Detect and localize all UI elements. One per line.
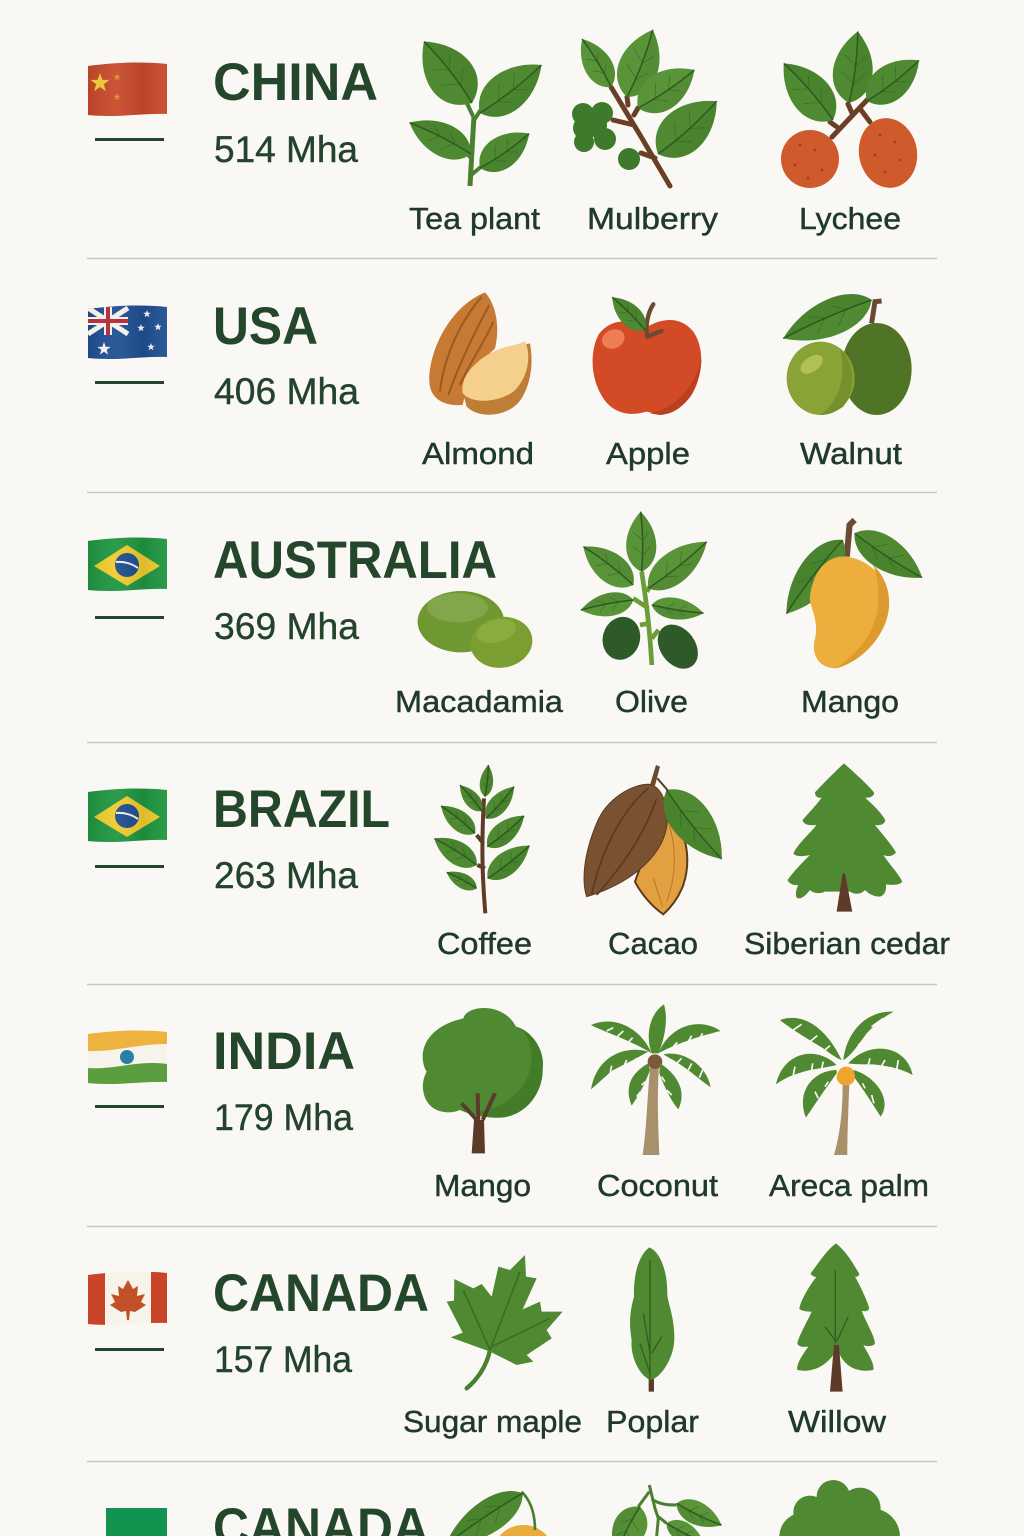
plant: walnut: Walnut — [800, 436, 902, 471]
rule — [95, 138, 164, 141]
plant: mango, cropped — [436, 1480, 553, 1536]
plant: tea plant: Tea plant — [409, 201, 540, 236]
area value: 406 Mha — [214, 371, 359, 412]
plant: apple: Apple — [606, 436, 690, 471]
plant: poplar — [606, 1247, 699, 1439]
plant: tree, cropped — [779, 1480, 900, 1536]
country name: USA — [213, 297, 318, 356]
row: second Canada (cut off) — [106, 1480, 900, 1536]
plant: willow: Willow — [788, 1404, 887, 1439]
plant: coffee — [428, 764, 537, 961]
area value: 514 Mha — [214, 129, 358, 170]
plant: tea plant — [402, 27, 554, 236]
flag: Brazil design — [88, 537, 167, 594]
plant: coconut — [591, 1004, 721, 1203]
plant: macadamia — [395, 591, 564, 719]
country name: CANADA — [213, 1264, 429, 1323]
rule — [95, 616, 164, 619]
plant: mango fruit — [772, 520, 931, 719]
plant: mulberry: Mulberry — [587, 201, 719, 236]
rule — [95, 1348, 164, 1351]
area value: 179 Mha — [214, 1097, 353, 1138]
row: USA — [88, 283, 912, 471]
area value: 263 Mha — [214, 855, 358, 896]
plant: olive: Olive — [615, 684, 688, 719]
plant: sugar maple — [403, 1255, 582, 1439]
plant: cacao: Cacao — [608, 926, 698, 961]
plant: mango tree — [423, 1008, 543, 1203]
flag: green — [106, 1508, 167, 1536]
plant: mango tree: Mango — [434, 1168, 531, 1203]
plant: mulberry — [570, 23, 732, 236]
plant: lychee: Lychee — [799, 201, 901, 236]
plant: apple — [593, 290, 702, 471]
plant: olive — [574, 511, 717, 719]
flag: Australia design — [88, 305, 167, 362]
plant: mango fruit: Mango — [801, 684, 899, 719]
country name: AUSTRALIA — [213, 531, 497, 590]
rule — [95, 381, 164, 384]
area value: 369 Mha — [214, 606, 359, 647]
row: China — [88, 23, 930, 236]
area value: 157 Mha — [214, 1339, 352, 1380]
row: Australia — [88, 511, 931, 719]
plant: areca palm — [769, 1012, 929, 1203]
plant: areca palm: Areca palm — [769, 1168, 929, 1203]
plant: coconut: Coconut — [597, 1168, 718, 1203]
flag: Canada — [88, 1271, 167, 1328]
plant: walnut — [776, 283, 912, 471]
plant: coffee: Coffee — [437, 926, 532, 961]
plant: almond: Almond — [422, 436, 534, 471]
row: Brazil — [88, 763, 950, 961]
plant: sugar maple: Sugar maple — [403, 1404, 582, 1439]
rule — [95, 865, 164, 868]
plant: branch, cropped — [602, 1485, 727, 1536]
flag: India — [88, 1030, 167, 1087]
plant: almond — [422, 292, 534, 471]
row: Canada — [88, 1243, 887, 1439]
plant: willow — [788, 1243, 887, 1439]
dividers — [87, 258, 937, 1462]
plant: cacao — [584, 765, 737, 961]
plant: lychee — [769, 29, 930, 236]
country name: INDIA — [213, 1022, 355, 1081]
row: India — [88, 1004, 929, 1203]
rule — [95, 1105, 164, 1108]
plant: macadamia: Macadamia — [395, 684, 564, 719]
country name: BRAZIL — [213, 780, 390, 839]
plant: Siberian cedar — [744, 763, 950, 961]
flag: Brazil — [88, 788, 167, 845]
flag: China — [88, 62, 167, 119]
country name: CHINA — [213, 53, 378, 112]
plant: poplar: Poplar — [606, 1404, 699, 1439]
plant: Siberian cedar: Siberian cedar — [744, 926, 950, 961]
